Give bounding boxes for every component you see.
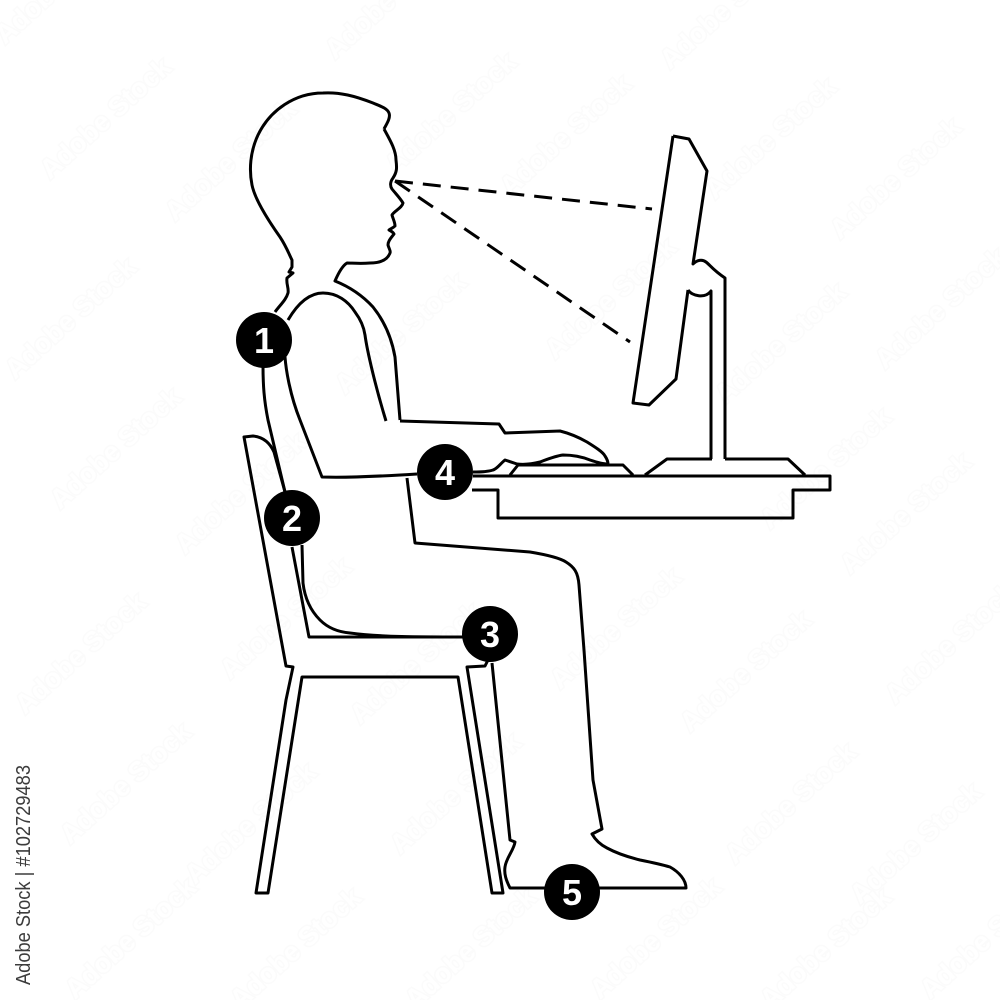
marker 3: 3 — [480, 614, 500, 655]
marker 1 — [236, 312, 292, 368]
watermark pattern: Adobe Stock — [544, 561, 687, 694]
keyboard — [510, 465, 633, 475]
watermark pattern: Adobe Stock — [699, 71, 842, 204]
watermark pattern: Adobe Stock — [719, 736, 862, 869]
watermark pattern: Adobe Stock — [169, 426, 312, 559]
marker 2 — [264, 490, 320, 546]
person: arm and hand — [288, 293, 608, 472]
watermark pattern: Adobe Stock — [709, 276, 852, 409]
person: head and neck — [250, 93, 389, 312]
marker 2: 2 — [282, 498, 302, 539]
person: face profile — [335, 129, 403, 420]
watermark pattern: Adobe Stock — [754, 401, 897, 534]
watermark pattern: Adobe Stock — [179, 756, 322, 889]
watermark pattern: Adobe Stock — [214, 551, 357, 684]
watermark pattern: Adobe Stock — [34, 51, 177, 184]
marker 4 — [417, 444, 473, 500]
watermark pattern: Adobe Stock — [54, 716, 197, 849]
watermark pattern: Adobe Stock — [9, 586, 152, 719]
watermark pattern: Adobe Stock — [344, 596, 487, 729]
marker 5 — [544, 864, 600, 920]
watermark pattern: Adobe Stock — [844, 776, 987, 909]
watermark pattern: Adobe Stock — [834, 446, 977, 579]
watermark pattern: Adobe Stock — [494, 68, 637, 201]
person: torso, leg and shoe — [407, 478, 686, 888]
watermark pattern: Adobe Stock — [384, 726, 527, 859]
watermark pattern: Adobe Stock — [379, 46, 522, 179]
watermark pattern: Adobe Stock — [824, 111, 967, 244]
desk — [472, 476, 830, 518]
person: back and arm underside — [263, 357, 417, 492]
marker 3 — [462, 606, 518, 662]
marker 1: 1 — [254, 320, 274, 361]
marker 4: 4 — [435, 452, 455, 493]
watermark pattern: Adobe Stock — [539, 231, 682, 364]
watermark pattern: Adobe Stock — [159, 93, 302, 226]
watermark pattern: Adobe Stock — [674, 604, 817, 737]
marker 5: 5 — [562, 872, 582, 913]
monitor — [633, 136, 725, 459]
monitor stand base — [645, 459, 805, 475]
watermark pattern: Adobe Stock — [44, 381, 187, 514]
side credit text: Adobe Stock | #102729483 — [13, 765, 35, 985]
watermark pattern: Adobe Stock — [0, 251, 142, 384]
chair — [244, 436, 503, 893]
person: lower back and thigh — [302, 545, 463, 637]
sightline dashes — [395, 181, 652, 342]
watermark pattern: Adobe Stock — [329, 266, 472, 399]
